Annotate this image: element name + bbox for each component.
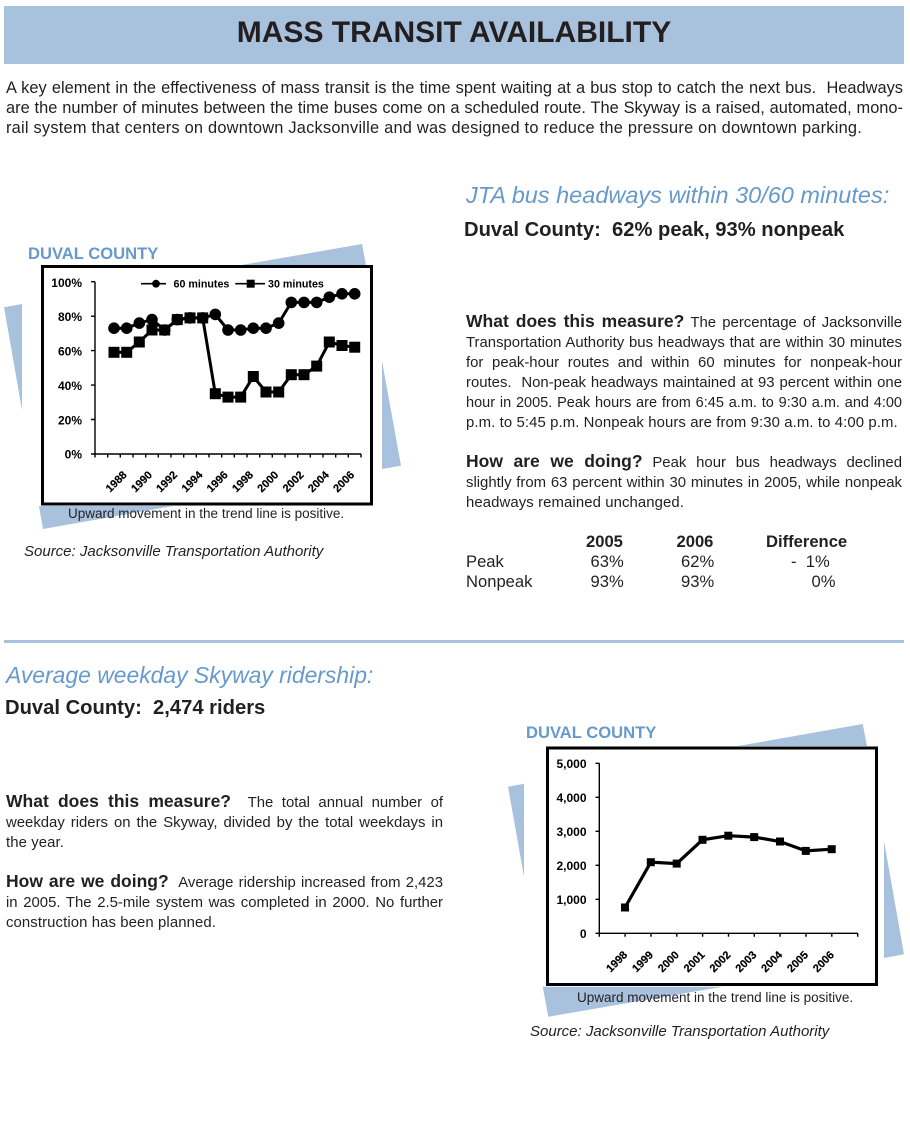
title banner: [4, 6, 904, 64]
text block: what does this measure: weekday riders on the Skyway, divided by the total weekdays in: [6, 815, 443, 831]
text block: what does this measure: What does this measure? The total annual number of: [6, 791, 443, 811]
y axis labels: 4,000: [556, 791, 587, 805]
comparison table: 2006: [676, 532, 713, 551]
chart frame: [548, 748, 876, 984]
y axis labels: [556, 757, 587, 941]
text block: how are we doing: slightly from 63 percent within 30 minutes in 2005, while nonpeak: [466, 475, 902, 491]
chart label: Duval County: DUVAL COUNTY: [28, 244, 158, 263]
comparison table: - 1%: [791, 552, 830, 571]
key figure: Duval County riders: Duval County: 2,474 riders: [5, 697, 265, 719]
text block: how are we doing: [466, 451, 902, 511]
y axis labels: 80%: [58, 310, 82, 324]
comparison table: [466, 532, 847, 591]
text block: what does this measure: for peak-hour routes and within 60 minutes for nonpeak-hour: [466, 355, 902, 371]
text block: how are we doing: headways remained unchanged.: [466, 495, 684, 511]
chart note: Upward movement in the trend line is positive.: [68, 506, 344, 521]
blue backing shapes: [508, 724, 904, 1017]
text block: what does this measure: routes. Non-peak headways maintained at 93 percent within one: [466, 375, 902, 391]
x axis labels: 2006: [811, 949, 837, 975]
comparison table: 93%: [590, 572, 624, 591]
text block: how are we doing: in 2005. The 2.5-mile system was completed in 2000. No further: [6, 895, 443, 911]
source note: Source: Jacksonville Transportation Authority: [24, 543, 323, 560]
y axis labels: 5,000: [556, 757, 587, 771]
comparison table: 63%: [590, 552, 624, 571]
text block: what does this measure: Transportation Authority bus headways that are within 30 minutes: [466, 335, 902, 351]
comparison table: Peak: [466, 552, 504, 571]
text block: what does this measure: hour in 2005. Peak hours are from 6:45 a.m. to 9:30 a.m. and 4:00: [466, 395, 902, 411]
x axis labels: 2004: [306, 469, 332, 495]
comparison table: 0%: [812, 572, 835, 591]
x axis labels: 2003: [734, 949, 759, 975]
panel: chart of bus headways: [4, 244, 401, 529]
y axis labels: 2,000: [556, 859, 587, 873]
x axis labels: 1990: [129, 469, 155, 495]
x axis labels: 2002: [281, 469, 307, 495]
x axis labels: [104, 469, 357, 495]
x axis labels: 1998: [230, 469, 256, 495]
x axis labels: 2005: [785, 949, 811, 975]
legend: 60 minutes: [174, 278, 229, 290]
heading: JTA bus headways: JTA bus headways within 30/60 minutes:: [466, 182, 889, 208]
x axis labels: 1992: [154, 469, 180, 495]
comparison table: Difference: [766, 532, 847, 551]
line: 60 minutes: [108, 288, 361, 336]
intro paragraph: are the number of minutes between the time buses come on a scheduled route. The Skyway is a raised, automated, mono-: [6, 99, 903, 117]
chart note: Upward movement in the trend line is positive.: [577, 990, 853, 1005]
chart frame: [42, 266, 372, 504]
y axis labels: 0%: [65, 448, 82, 462]
text block: what does this measure: [6, 791, 444, 851]
blue backing shapes: [4, 244, 401, 529]
key figure: Duval County headways: Duval County: 62% peak, 93% nonpeak: [464, 219, 844, 241]
text block: what does this measure: p.m. to 5:45 p.m. Nonpeak hours are from 9:30 a.m. to 4:00 p.m.: [466, 415, 898, 431]
y axis labels: 100%: [51, 276, 82, 290]
text block: what does this measure: [466, 311, 902, 431]
y axis labels: 40%: [58, 379, 82, 393]
intro paragraph: [6, 79, 903, 137]
comparison table: 2005: [586, 532, 623, 551]
line: weekday ridership: [621, 832, 836, 912]
axes: [91, 282, 361, 458]
heading: average weekday Skyway ridership: Average weekday Skyway ridership:: [6, 662, 373, 688]
x axis labels: 2002: [708, 949, 733, 975]
chart label: Duval County: DUVAL COUNTY: [526, 723, 656, 742]
x axis labels: [604, 949, 837, 975]
x axis labels: 2006: [331, 469, 357, 495]
source note: Source: Jacksonville Transportation Authority: [530, 1023, 829, 1040]
comparison table: Nonpeak: [466, 572, 532, 591]
y axis labels: 1,000: [556, 893, 587, 907]
legend: 30 minutes: [268, 278, 324, 290]
x axis labels: 1996: [205, 469, 231, 495]
section divider: [4, 640, 904, 643]
text block: what does this measure: the year.: [6, 835, 64, 851]
x axis labels: 1994: [180, 469, 206, 495]
axes: [596, 763, 858, 937]
text block: how are we doing: How are we doing? Peak hour bus headways declined: [466, 451, 902, 471]
y axis labels: 60%: [58, 344, 82, 358]
x axis labels: 2004: [759, 949, 786, 975]
y axis labels: 0: [580, 927, 587, 941]
text block: how are we doing: How are we doing? Average ridership increased from 2,423: [6, 871, 443, 891]
line: 30 minutes: [108, 312, 360, 403]
comparison table: 93%: [681, 572, 714, 591]
intro paragraph: rail system that centers on downtown Jacksonville and was designed to reduce the pressure on downtown parking.: [6, 119, 862, 137]
x axis labels: 2000: [656, 949, 682, 975]
x axis labels: 2000: [255, 469, 281, 495]
x axis labels: 1998: [604, 949, 630, 975]
y axis labels: 3,000: [556, 825, 587, 839]
panel: chart of Skyway ridership: [508, 724, 904, 1017]
y axis labels: [51, 276, 82, 462]
x axis labels: 1999: [630, 949, 656, 975]
x axis labels: 1988: [104, 469, 130, 495]
comparison table: 62%: [681, 552, 714, 571]
x axis labels: 2001: [682, 949, 708, 975]
intro paragraph: A key element in the effectiveness of mass transit is the time spent waiting at a bus stop to catch the next bus. Headways: [6, 79, 903, 97]
text block: what does this measure: What does this measure? The percentage of Jacksonville: [466, 311, 902, 331]
text block: how are we doing: [6, 871, 443, 931]
y axis labels: 20%: [58, 414, 82, 428]
text block: how are we doing: construction has been planned.: [6, 915, 216, 931]
title banner: MASS TRANSIT AVAILABILITY: [237, 16, 671, 49]
legend: [141, 278, 324, 290]
